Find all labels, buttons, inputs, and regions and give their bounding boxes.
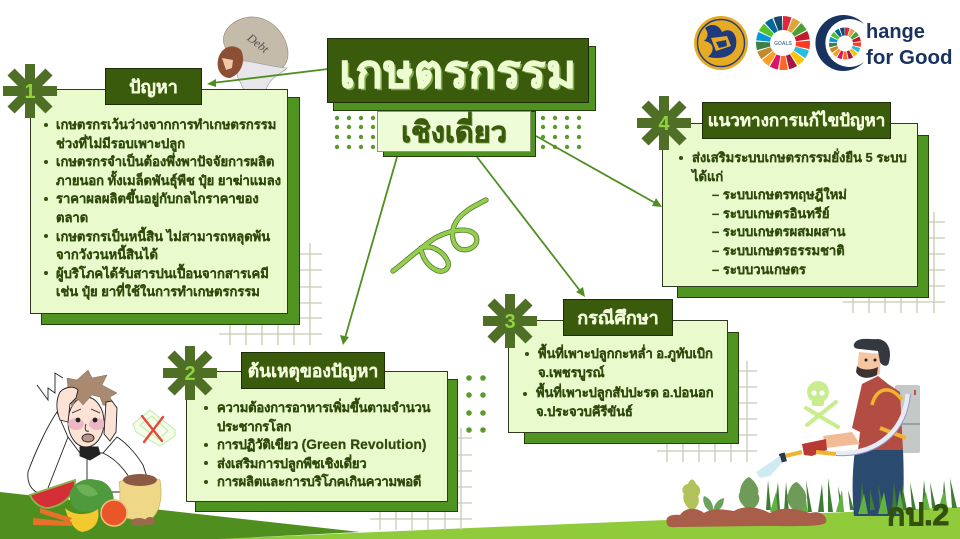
grid behind panel 2	[370, 428, 472, 530]
panel 4 bullet list: ได้แก่	[692, 169, 723, 184]
panel 1: ปัญหา	[3, 64, 300, 325]
panel 1 bullet list: เช่น ปุ๋ย ยาที่ใช้ในการทำเกษตรกรรม	[56, 284, 260, 299]
panel 3 bullet list: พื้นที่เพาะปลูกสัปปะรด อ.บ่อนอก	[536, 385, 714, 400]
panel 1 bullet list: ช่วงที่ไม่มีรอบเพาะปลูก	[56, 136, 185, 151]
dots between panel 2 and panel 3	[466, 375, 486, 433]
illustration: stressed man	[28, 370, 152, 492]
illustration: person carrying debt sack	[218, 17, 288, 90]
arrow: title to panel 1	[207, 69, 328, 87]
panel 4 bullet list: – ระบบเกษตรธรรมชาติ	[712, 243, 845, 258]
panel 1 bullet list: ผู้บริโภคได้รับสารปนเปื้อนจากสารเคมี	[56, 266, 269, 281]
icon: skull and crossbones	[806, 381, 838, 427]
panel 2 heading	[241, 352, 385, 389]
panel 3 bullet list	[536, 344, 714, 419]
icon: crossed-out money	[133, 410, 175, 446]
logo: Change for Good	[815, 15, 953, 71]
panel: subtitle block	[377, 111, 536, 157]
illustration: soil mound	[666, 507, 826, 527]
panel 3 heading: กรณีศึกษา	[577, 308, 659, 328]
illustration: leafy plants	[682, 477, 806, 512]
arrow: subtitle to panel 2	[340, 157, 397, 345]
panel 2 bullet list: การผลิตและการบริโภคเกินความพอดี	[217, 474, 421, 489]
panel 1 bullet list: เกษตรกรจำเป็นต้องพึ่งพาปัจจัยการผลิต	[56, 154, 274, 169]
panel 1 bullet list: เกษตรกรเว้นว่างจากการทำเกษตรกรรม	[56, 117, 276, 132]
dots right of subtitle	[541, 116, 581, 149]
dots left of subtitle	[335, 116, 375, 149]
logo: Ministry garuda seal	[694, 16, 748, 70]
arrow: subtitle to panel 4	[536, 136, 662, 207]
panel 4 bullet list: ส่งเสริมระบบเกษตรกรรมยั่งยืน 5 ระบบ	[692, 150, 907, 165]
panel 4 heading	[702, 102, 891, 139]
panel 4 number badge	[637, 96, 691, 150]
panel 2 heading: ต้นเหตุของปัญหา	[248, 360, 378, 380]
footer label: กป.2	[887, 499, 949, 532]
logo: Change for Good: hange	[866, 21, 925, 43]
panel 3 number badge	[483, 294, 537, 348]
panel 1 bullet list: จากวังวนหนี้สินได้	[56, 247, 158, 262]
grid behind panel 3	[657, 361, 757, 462]
grid behind panel 4	[843, 212, 945, 313]
panel 1 heading	[105, 68, 202, 105]
panel 4 heading: แนวทางการแก้ไขปัญหา	[708, 111, 885, 130]
panel 1 number badge	[3, 64, 57, 118]
logo: SDG wheel	[763, 23, 803, 63]
arrow: subtitle to panel 3	[477, 157, 585, 297]
logo: SDG wheel: GOALS	[774, 41, 793, 47]
squiggle decoration	[393, 200, 486, 271]
panel 2 bullet list: ส่งเสริมการปลูกพืชเชิงเดี่ยว	[217, 456, 366, 471]
illustration: farmer spraying	[756, 339, 920, 516]
illustration: person carrying debt sack: Debt	[244, 30, 272, 56]
panel: title block	[327, 38, 596, 111]
panel 1 bullet list: ตลาด	[56, 210, 88, 225]
illustration: produce pile	[30, 474, 161, 532]
subtitle: เชิงเดี่ยว: เชิงเดี่ยว	[401, 116, 507, 148]
panel 4 bullet list: – ระบบวนเกษตร	[712, 262, 806, 277]
illustration: grass	[766, 478, 957, 514]
background ground: light green	[215, 507, 960, 539]
panel 4 bullet list: – ระบบเกษตรอินทรีย์	[712, 206, 829, 221]
panel 2 number badge: 2	[184, 363, 196, 385]
panel 3 bullet list: พื้นที่เพาะปลูกกะหล่ำ อ.ภูทับเบิก	[538, 346, 713, 361]
background ground: dark green	[0, 492, 360, 539]
panel 1 bullet list: ราคาผลผลิตขึ้นอยู่กับกลไกราคาของ	[56, 191, 259, 206]
panel 2 bullet list: การปฏิวัติเขียว (Green Revolution)	[217, 437, 427, 452]
panel 3 bullet list: จ.ประจวบคีรีขันธ์	[536, 404, 633, 419]
title: เกษตรกรรม: เกษตรกรรม	[339, 46, 577, 96]
panel 1 bullet list	[56, 117, 281, 300]
panel 3 bullet list: จ.เพชรบูรณ์	[538, 365, 604, 380]
panel 1 heading: ปัญหา	[129, 77, 178, 97]
panel 2 bullet list: ความต้องการอาหารเพิ่มขึ้นตามจำนวน	[217, 400, 430, 415]
panel 3: กรณีศึกษา	[483, 294, 739, 444]
panel 2: ต้นเหตุของปัญหา	[163, 346, 458, 512]
panel 1 bullet list: ภายนอก ทั้งเมล็ดพันธุ์พืช ปุ๋ย ยาฆ่าแมลง	[56, 173, 281, 188]
panel 2 bullet list	[217, 398, 431, 489]
panel 4 bullet list: – ระบบเกษตรผสมผสาน	[712, 224, 845, 239]
panel 3 number badge: 3	[504, 311, 516, 333]
panel 2 number badge	[163, 346, 217, 400]
panel 1 bullet list: เกษตรกรเป็นหนี้สิน ไม่สามารถหลุดพ้น	[56, 229, 270, 244]
panel 2 bullet list: ประชากรโลก	[217, 419, 291, 434]
panel 1 number badge: 1	[24, 81, 36, 103]
panel 4 number badge: 4	[658, 113, 670, 135]
grid behind panel 1	[219, 243, 322, 345]
logo: Change for Good: for Good	[866, 46, 953, 69]
panel 4 bullet list	[690, 148, 907, 277]
panel 3 heading	[563, 299, 673, 336]
panel 4: แนวทางการแก้ไขปัญหา	[637, 96, 929, 298]
panel 4 bullet list: – ระบบเกษตรทฤษฎีใหม่	[712, 187, 847, 202]
subtitle: เชิงเดี่ยว	[377, 111, 531, 152]
